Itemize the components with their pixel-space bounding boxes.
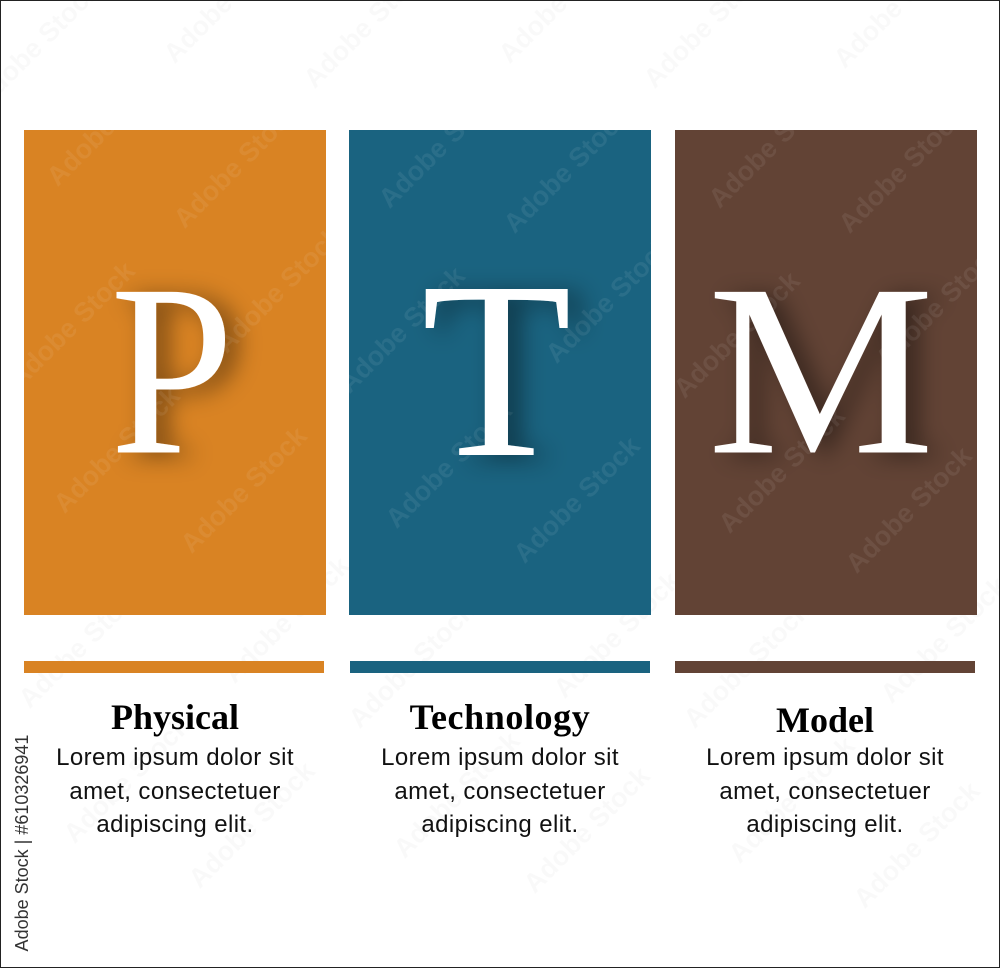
text: technology description (381, 744, 619, 838)
watermark: white over panels: Adobe Stock (380, 395, 518, 534)
watermark: white over panels: Adobe Stock (668, 265, 806, 404)
letter P: P (110, 234, 234, 506)
watermark: white over panels: Adobe Stock (703, 75, 841, 214)
panel: M (675, 130, 976, 614)
watermark id: Adobe Stock | #610326941 (12, 734, 32, 951)
watermark: white over panels: Adobe Stock (41, 53, 179, 192)
watermark: white over panels: Adobe Stock (498, 100, 636, 239)
text: physical description: amet, consectetuer (69, 778, 281, 804)
text: physical description: Lorem ipsum dolor sit (56, 744, 294, 771)
watermark: grey on white background: Adobe Stock (723, 730, 861, 869)
watermark: white over panels: Adobe Stock (540, 230, 678, 369)
text: model description: adipiscing elit. (746, 811, 904, 838)
heading: Physical: Physical (111, 697, 239, 737)
panel: T (349, 130, 651, 614)
watermark: white over panels: Adobe Stock (210, 220, 348, 359)
watermark: grey on white background: Adobe Stock (218, 550, 356, 689)
bar: physical (24, 661, 324, 673)
heading: Model: Model (776, 700, 874, 740)
text: physical description: adipiscing elit. (96, 811, 254, 838)
watermark: white over panels: Adobe Stock (333, 260, 471, 399)
watermark: grey on white background: Adobe Stock (343, 595, 481, 734)
watermark: grey on white background: Adobe Stock (848, 775, 986, 914)
text: technology description: amet, consectetuer (394, 778, 606, 804)
watermark: grey on white background: Adobe Stock (13, 575, 151, 714)
watermark: grey on white background: Adobe Stock (183, 755, 321, 894)
watermark: white over panels: Adobe Stock (840, 440, 978, 579)
bar: model (675, 661, 975, 673)
watermark: white over panels: Adobe Stock (175, 420, 313, 559)
text: model description (706, 744, 944, 838)
watermark: grey on white background: Adobe Stock (58, 710, 196, 849)
text: physical description (56, 744, 294, 838)
text: model description: amet, consectetuer (719, 778, 931, 804)
watermark: grey on white background: Adobe Stock (678, 595, 816, 734)
watermark: white over panels: Adobe Stock (833, 100, 971, 239)
watermark: white over panels: Adobe Stock (168, 95, 306, 234)
watermark: grey on white background: Adobe Stock (548, 565, 686, 704)
text: technology description: Lorem ipsum dolor sit (381, 744, 619, 771)
watermark: white over panels: Adobe Stock (713, 400, 851, 539)
heading: Technology: Technology (410, 697, 590, 737)
text: model description: Lorem ipsum dolor sit (706, 744, 944, 771)
letter T: T (421, 230, 572, 511)
watermark: white over panels: Adobe Stock (373, 75, 511, 214)
text: technology description: adipiscing elit. (421, 811, 579, 838)
watermark: white over panels: Adobe Stock (48, 380, 186, 519)
watermark: grey on white background: Adobe Stock (388, 725, 526, 864)
watermark: grey on white background: Adobe Stock (518, 760, 656, 899)
watermark: white over panels: Adobe Stock (3, 255, 141, 394)
watermark: white over panels: Adobe Stock (508, 430, 646, 569)
letter M: M (707, 235, 935, 506)
bar: technology (350, 661, 650, 673)
panel: P (24, 130, 326, 614)
